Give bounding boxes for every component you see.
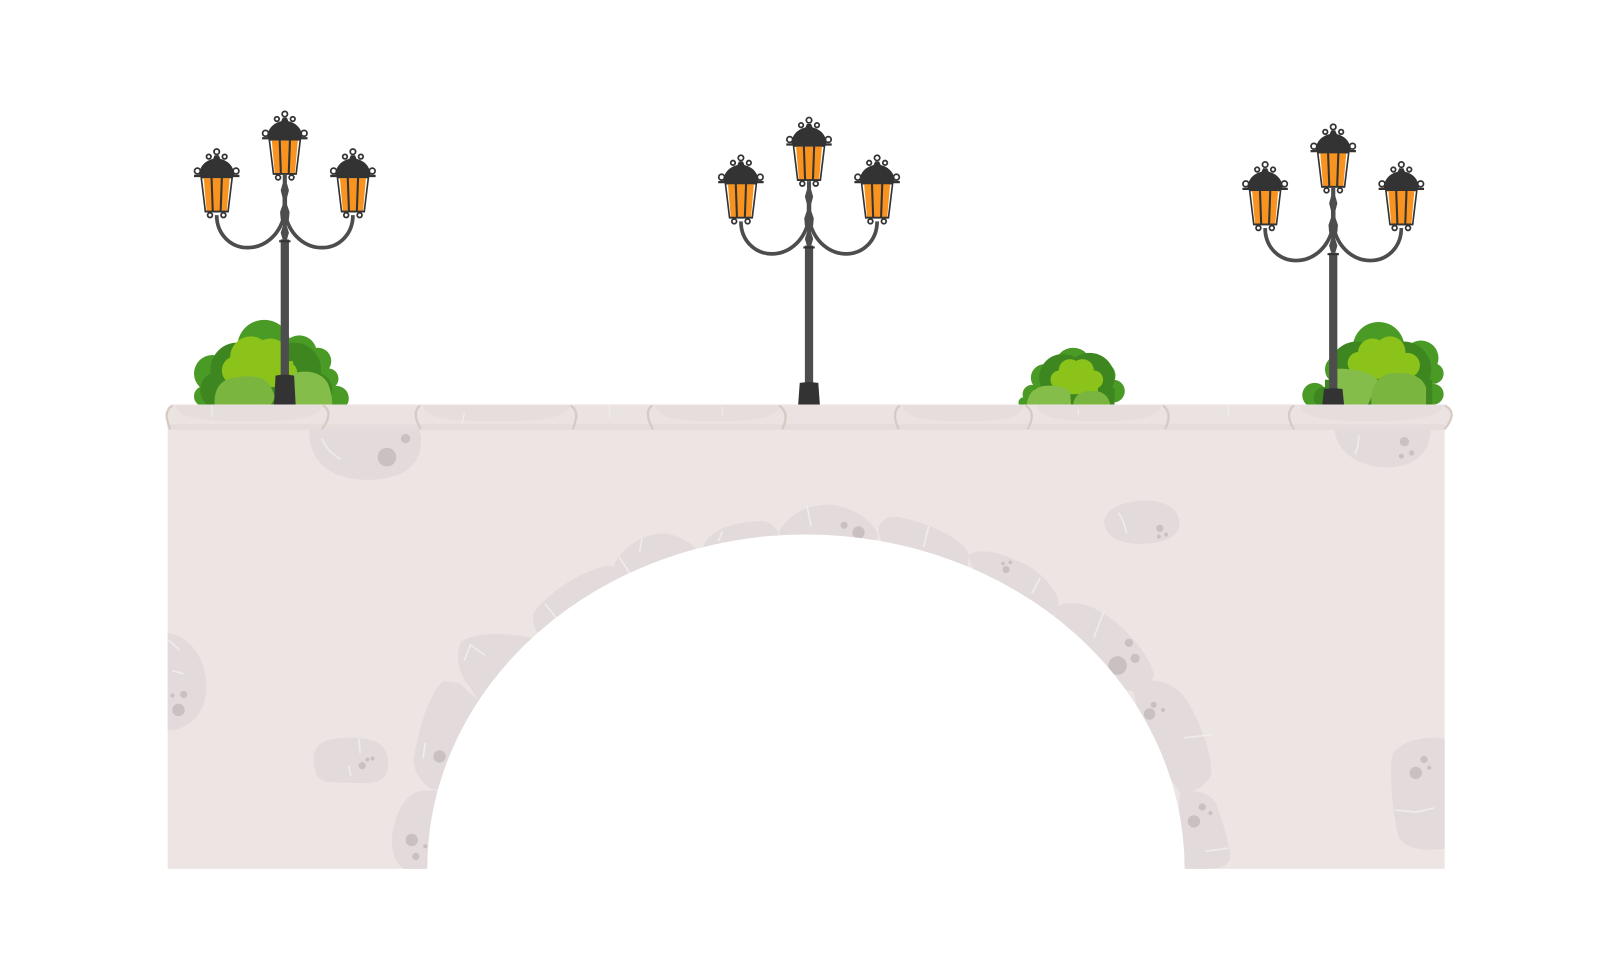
bridge coping stones	[166, 405, 1452, 430]
bush: centre right	[1018, 348, 1125, 408]
illustration: stone bridge with lamps and bushes	[166, 110, 1453, 869]
bush: left	[194, 320, 349, 404]
lamp post: left	[194, 111, 376, 405]
lamp post: right	[1242, 124, 1424, 405]
lamp post: centre	[718, 118, 900, 405]
stone pits	[170, 434, 1431, 860]
bush: right	[1302, 322, 1444, 408]
stone cracks	[168, 435, 1434, 851]
wall stones	[165, 425, 1447, 869]
bridge wall with arch	[165, 413, 1447, 870]
arch opening	[427, 535, 1185, 870]
